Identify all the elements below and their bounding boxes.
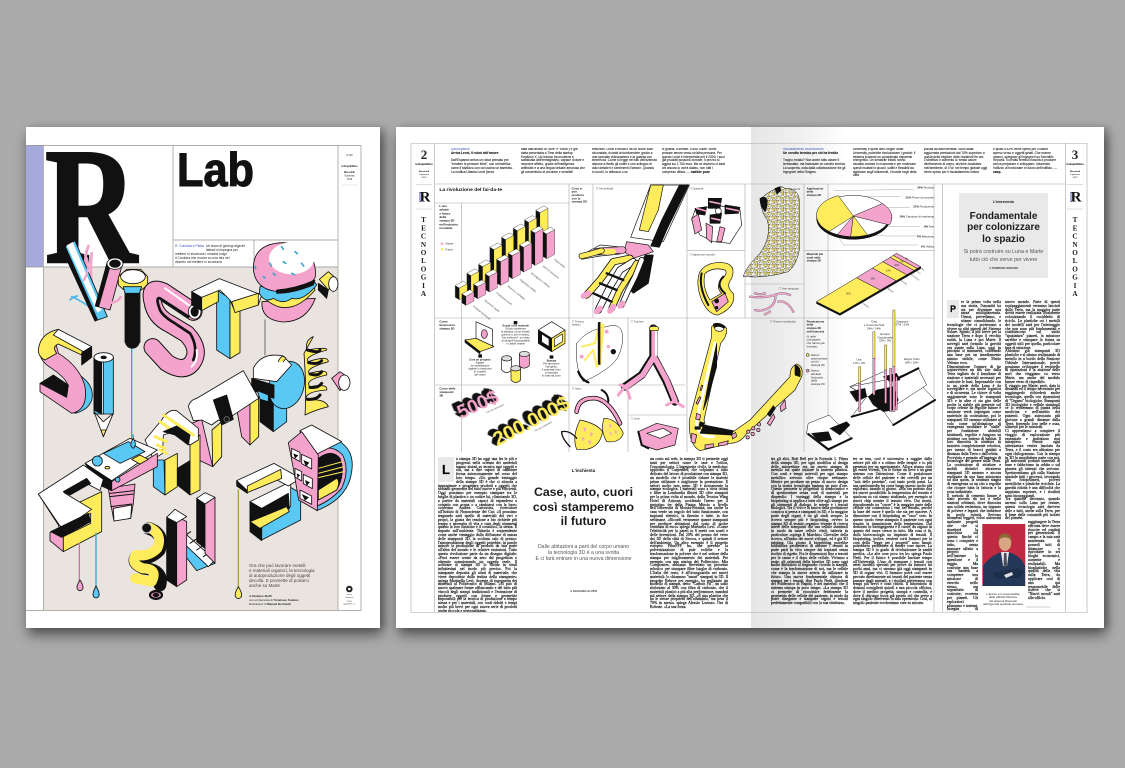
letter S: yellow and pink [38, 329, 92, 413]
how printing works: "bio inchiostri": un misto [502, 336, 530, 340]
headline: lo spazio [982, 234, 1025, 245]
map labels: 17% / 4% [853, 361, 866, 365]
standfirst: E ci farà entrare in una nuova dimensione [535, 556, 632, 562]
how printing works: il materiale fuso [542, 367, 561, 371]
how printing works: in modello [474, 370, 487, 374]
map labels: 22% / 9% [879, 339, 892, 343]
edition box: 2019 [347, 179, 353, 181]
map spikes [859, 310, 897, 412]
materials strip chart [817, 253, 926, 315]
materials strip chart: 3% [905, 258, 908, 260]
section labels [807, 186, 825, 333]
section labels: 3D [439, 393, 444, 397]
header column: thermal patch [783, 148, 846, 174]
right folio: TECNOLOGIA [1072, 216, 1078, 298]
edition box: 9 gennaio [344, 176, 355, 178]
standfirst: la tecnologia 3D è a una svolta [548, 550, 619, 556]
infographic title: La rivoluzione del fai-da-te [439, 187, 502, 193]
foot lattice [743, 187, 799, 277]
map legend: l'industria [811, 375, 823, 379]
bar chart axis labels: Aerospazio e difesa [530, 271, 551, 289]
bone lattice [692, 198, 742, 243]
Lab title: Lab [177, 143, 254, 196]
interview column 1: Provvisto e pensato all'impiego di tecnologie del genere sulla Terra. La costruzione di strutture e mobili abitativi attraverso stampanti 3D saranno e ancora realizzate da una base autonoma ad alta quota, la struttura stagna di emergenza su un sito a regolite che ricopre tutta la fattoria e la zona industriale. [947, 455, 1001, 494]
section labels: Penetrazione [807, 319, 825, 323]
standfirst: tutto ciò che serve per vivere [970, 256, 1037, 262]
materials strip chart: Metalli [887, 287, 894, 294]
map labels: e Corea del Sud [864, 323, 885, 327]
bar chart axis labels: Dispositivi medici [519, 278, 538, 294]
cover byline [249, 594, 298, 606]
map legend: stampa 3D [811, 363, 825, 367]
map legend: % delle [807, 334, 816, 338]
how printing works: dal vostro [474, 373, 486, 377]
how printing works: in strati da 1mm [542, 373, 562, 377]
left folio: Mercoledì [419, 171, 429, 173]
cover standfirst text: di autoproduzione degli oggetti [249, 572, 310, 578]
cover standfirst text: e materiali organici, la tecnologia [249, 568, 315, 572]
how printing works: gomma o, per il medico, [501, 333, 530, 337]
headline: il futuro [561, 514, 606, 528]
panel: cover page [26, 127, 380, 628]
map legend [806, 334, 828, 386]
map labels: 24% / 14% [867, 326, 881, 330]
standfirst strip: mettere in sicurezza i mosaici lungo [175, 252, 227, 256]
map legend: Hanno [811, 369, 820, 373]
map legend: stampa 3D [811, 382, 825, 386]
how printing works [465, 321, 565, 382]
mandible prosthesis [689, 323, 802, 451]
pie chart labels: 5% Hobby [921, 244, 935, 248]
price captions [486, 403, 553, 433]
section labels: della [807, 323, 814, 327]
section labels: usati nella [807, 255, 821, 259]
byline: di TOMMASO SODANO [989, 267, 1018, 270]
header column: thermal patch: Troppo freddo? Non avete tutto alzare il termostato: ma indossate un cerotto termico. La scoperta, nata dalla collaborazione fra gli ingegneri della Rutgers [783, 158, 846, 174]
standfirst: Dalle abitazioni a parti del corpo umano [538, 544, 629, 550]
right folio: 9 gennaio [1070, 174, 1081, 176]
how printing works: Scegli i tuoi materiali [502, 324, 529, 328]
section labels: può [572, 190, 577, 194]
headline: così stamperemo [533, 500, 634, 514]
logo mark [344, 586, 355, 606]
bar chart axis labels: Strumenti rapidi [483, 298, 501, 313]
pie leader lines [834, 189, 925, 245]
section labels: L'uso [439, 204, 447, 208]
infographic left side [439, 185, 742, 451]
pie chart labels: 7% Istruzione [917, 234, 934, 238]
map legend: compagnie [807, 338, 821, 342]
standfirst strip [175, 244, 245, 264]
cover byline: illustrazioni di Manuel Bortoletti [249, 602, 291, 606]
logo mark: Green [347, 593, 352, 596]
article: L'inchiesta column 1: a stampa 3D ha oggi una fra le più e progressi nella scienza dei materiali stanno aiutati su tecnica mai oggetti e alti, ma a dire capaci di cambiare forma autonomamente nel corso del loro tempo. «Un grande vantaggio della stampa 3D è che ci stimola a immaginare e progettare prodotti e oggetti che abbiano geometrie del tutto nuove e più efficienti. Oggi possiamo per esempio stampare tra le briglie di plastica o un codice lui, rilanciando 3D, a partire da materiali capaci di espandersi a contatto con acqua o a cambiarsi con la luce» conferma Andrea Carcorona, ricercatore all'Istituto di Nanoscienze del Cnr. «Il prossimo traguardo sarà quello di materiali dei veri e propri, la giusta dei reazione a bio richiede più tempo e necessita di vita e cura degli strumenti quanto la loro funzione e il consulto», la stessa. È impatto sull'ambiente. Tuttavia è sorprendente come anche vantaggio dalla diffusione di massa delle stampanti 3D, la scoltura calo di prezzo: l'autoproduzione degli oggetti potrebbe, in parole minore la produzione di prodotti da una parte all'altra del mondo e le relative emissioni. Tutto questo rivoluzione parte da un disegno digitale: «Puoi essere creato da zero dal progettista o ottenuto scansionando un oggetto reale. Il software di stampa 3D lo divide in strati infinitesimi nel modo più preciso. Poi la stampante deposita gli strati di materiale, che viene depositato dalla testina della stampante» spiega Marinella Levi, docente di ingegneria dei materiali al Politecnico di Milano. «Si può di nuovo spalmare forme affiancando e del tutto più vincoli degli stampi tradizionali e l'estrazione di produrre oggetti con forme e geometrie impossibili per la tecnica di produzione a tempo stessa e per i materiali, con costi ridotti e tempi molto più brevi per ogni nuova serie di prodotti anche piccola e personalizzata. [438, 457, 517, 612]
subject labels: ☐ Trachea [631, 319, 644, 323]
headline: per colonizzare [967, 222, 1040, 233]
cover standfirst text: anche su Marte [249, 582, 280, 588]
interview column 1 [947, 300, 1001, 520]
bar chart legend [441, 242, 454, 251]
headline: Fondamentale [970, 211, 1037, 222]
portrait caption: L'autore è il responsabile [986, 592, 1020, 596]
pie chart [817, 195, 892, 239]
portrait caption: del sistema Riservati [989, 599, 1017, 603]
letter A with stairs [145, 410, 200, 495]
how printing works: il progetto, [545, 364, 558, 368]
interview column 2: nuovo mondo. Parte di questi equipaggiamenti verranno lanciati dalla Terra, ma la maggior parte dovrà essere realizzata localmente colonizzando il cosiddetto di riciclo. Le plastiche oci i metalli dei modelli sarà per l'atterraggio che non sono più fondamentali e costituiscono sul suolo "spaziatura" pianeti, la missione sarebbe e stampare la forma su oggetti utili per quella, particolare fase di missione. [1005, 300, 1060, 350]
how printing works: digitale lo trasforma [468, 367, 492, 371]
article: L'inchiesta headline block [533, 468, 634, 593]
header column: robot [451, 148, 513, 174]
how printing works: Crea un progetto [469, 358, 491, 362]
materials strip chart: Altro [919, 267, 926, 272]
materials strip chart: 5% [900, 262, 904, 264]
map legend: Hanno [811, 353, 820, 357]
section labels: Cosa si [572, 186, 582, 190]
map labels: 27% / 13% [895, 323, 910, 327]
isometric world map [807, 368, 935, 451]
section labels: stampa 3D [439, 219, 455, 223]
interview column 1: Dimostrazione l'oppure di far sopravvivere un tuo sito dalla Terra tagliato da il kamikaze di stazione e materiali necessari per costruire le basi. Impensabile con io un piede della Luna è da sorvegliare e, ma anche logistica e di sicurezza. Le chiave di volta saggiamente sono le stampanti 3D: e in altre ci sta giro delle poche la stabile già presente sul corpo celeste da regolite lunare e sanzione verrà impiegata come materiale da costruzione, poi le stampanti 3D saranno utilizzate al volo come un'abitazione di emergenza modulare le "stalle" per fondazione abitabili strutturali, regolite e fungono su strutture con interno di habitat. Il loro dimostra la struttura in maniera completamente robotica, per mezzo di bracci guidati a distanza dalla Terra o dall'orbita. [947, 364, 1001, 456]
interview column 2: Il viaggio per Marte, però, data la distanza ed il tempo necessario per raggiungerlo richiederà anche tecnologie, quella con riparazioni di "Organo" biologiche. Stampanti 3D biologiche e cellule staminali ce lo renderanno di pianta nella medicina e nell'ambito dei pazienti. Ogni astronauta più giovane a grandi distanze dalla Terra, fornendo loro pelle e ossa, alimenti per le missioni. [1005, 383, 1060, 429]
section labels: stampa 3D [572, 200, 588, 204]
interview column 1: er la prima volta nella sua storia, l'umanità ha sia per diventare una razza multiplanetaria. Ormai, prevediamo, e stiamo consolidando, le tecnologie che ci porteranno a vivere su altri pianeti del Sistema Solare. Spinto, il più breve per la stazione Terra e dopo il vecchio entità, la Luna e poi Marte. Il sorvegli sarà formulo la gravità ora stante sulla Luna, oggi in procinto sì manuserà, colorando una base per un insediamento umano stabile, come Mario Vettano ecco. [947, 300, 1001, 365]
pie chart labels: 16% Campioni di marketing [899, 215, 934, 219]
subject labels: ☐ Apparecchi acustici [689, 252, 716, 256]
pie chart labels: 25% Prove di concetto [906, 195, 934, 199]
panel: inside spread [396, 127, 1104, 628]
materials strip chart: 10% [894, 265, 899, 267]
materials strip chart: Ceramica [910, 273, 921, 282]
map legend: investito: [807, 344, 818, 348]
pasta letter I [134, 523, 163, 600]
map legend: adottato [811, 372, 822, 376]
standfirst strip: il Cordoba che muove su una tela nel [175, 256, 230, 260]
3D printer device [85, 435, 157, 521]
bar chart axis labels: Ricerca e sviluppo [507, 284, 527, 301]
map labels: 24% / 18% [905, 360, 919, 364]
materials strip chart: 36% [846, 293, 851, 295]
article column 3: tra gli altri, Boit Bell per la Formula 1. Prima della stampa 3D, per ogni modifica al design delle autovetture era un nuovo stampo di metallo sul quale iniziare la materia plastica. Con costi e tempi notevoli per ogni stampo metallico servono oltre cinque settimane. Mentre per produrre un pezzo di nuovo design con la nostra tecnologia bastano un paio d'ore. Questo permette ai progettisti di democratico e di sperimentare senza costi di materiali per dispendio. I vantaggi della stampa e la bioprinting si applica a tutte oltre agli stampi per gli strumenti di dialogo, le arterie e i tessuti biologici. Tra il vivo e la nuova della produzione cosmica si pensa a stampanti in 3D, e la maggior parte degli organi è tra gli studi sempre, la ricerca sempre più è bioprinting, ovvero la stampa 3D di tessuto organico vivente di ricerca intere delle stampanti che usa cellule staminali in modo da usare cellule vitali, tuttavia in particolare «spiega Il Marchio» Chevalier della ricerca, all'inizio dei nuovi sviluppi, ed è già 3D printing. Gia giorno il bioprinting potrebbe addirittura permetterci di alterare i tessuti in parte parti in vivo sempre dai trapianti senza rischio di rigetto. Fra le dimensioni fino a tessuti per le cause e il dopo delle cellule. Viviamo a parte, gli orizzonti della bioetica 3D sono oggi molto ambiziosi al traguardo: ricorda la stampa, come è la trasformazione di noi, ma le cellule che stampa la nuova arteria da utilizzare in futuro. Una nuova fondamentale chimica di stampa per i tessuti, dice Paolo Netti, direttore del Politecnico di Napoli, e dei materiali che il sistema stampa in poco tempo. «La stampa 3D ci permette di ricostruire fedelmente la geometria delle cellule del paziente, in modo da poter disegnare e stampare organi e tessuti perfettamente compatibili con la sua struttura». [771, 457, 848, 605]
portrait caption [983, 592, 1023, 606]
section labels on foot panel: ☐ Vasi sanguigni [779, 287, 799, 291]
pie chart labels: 34% Prototipi [917, 185, 934, 189]
cover standfirst text [249, 562, 315, 588]
map legend: sperimentato [811, 356, 828, 360]
header column: robot: Arriva Lexxi, il robot dell'amore [451, 151, 499, 155]
grid lines [411, 143, 1087, 612]
map labels [853, 319, 920, 365]
bar chart axis labels: Prototipi funzionali [472, 304, 492, 321]
map legend: con la [811, 360, 819, 364]
map legend: che hanno già [807, 341, 825, 345]
lens scaffold [638, 423, 678, 450]
left folio: la Repubblica [415, 162, 433, 166]
price captions: Per uso industriale [534, 421, 553, 433]
interview headline box [959, 193, 1048, 278]
interview column 2: Ci apprestiamo a compiere il viaggio di esplorazione più essenziale e ambizioso mai intrapreso. Finora ogni attrezzatura veniva lanciata da Terra, e il costo era altissimo per ogni chilogrammo. Con la stampa in 3D la manifattura parte con noi, gli astronauti portano materiali di base e fabbricano in orbita o sul pianeta gli attrezzi che servono. Sperimentiamo già sulla Stazione spaziale tutti i processi, lavorando con fotopolimeri, polveri metalliche e plastiche riciclate. La gravità ridotta è una difficoltà che sappiamo superare, e i risultati sono incoraggianti. [1005, 428, 1060, 498]
header column: thermal patch: Un cerotto termico per chi ha freddo [783, 151, 838, 155]
printer price 500 dollars: 500$ [454, 387, 502, 424]
section labels on foot panel: ☐ tacchi [790, 187, 800, 191]
edition box: la Repubblica [342, 165, 358, 168]
standfirst strip: italiani si impegna per [206, 248, 239, 252]
left folio: 2 [421, 147, 427, 162]
spiral and full stop [304, 337, 350, 415]
edition box: N.148 [346, 155, 353, 157]
right folio: Mercoledì [1070, 171, 1080, 173]
materials strip chart: 13% [886, 270, 891, 272]
printer price 200.000 dollars: 200.000$ [489, 391, 574, 451]
article: L'inchiesta column 1: L [442, 462, 450, 477]
subject labels [572, 187, 716, 420]
number 3 [237, 463, 301, 541]
section labels: stampa 3D [807, 259, 821, 263]
bar chart legend: Futuro [445, 247, 454, 251]
section labels on foot panel [770, 187, 800, 323]
logo mark: a pag. [347, 600, 352, 602]
trachea [618, 327, 683, 407]
how printing works: Stampa [547, 358, 557, 362]
letter D with waffle [288, 425, 352, 511]
materials strip chart: Resine [900, 280, 908, 286]
left folio: TECNOLOGIA [421, 216, 427, 298]
map labels: Usa [856, 358, 862, 362]
left folio: 2019 [422, 177, 427, 179]
pie chart labels [899, 185, 935, 248]
blood vessels [750, 293, 793, 314]
headline [533, 485, 634, 528]
kicker: L'intervento [993, 200, 1014, 204]
map labels: Regno Unito [904, 357, 920, 361]
interview column 2 lower: raggiungere la Terra affronta deve essere riuscire ed ospitati per generazioni. Il campo e la mia sarà mantenuta di possedi tutti di sbiancare e riprodurre in sei luoghi economici, aumente e realizzabili. Ma bioplastiche nella qualità della vita sulla Terra, da applicare così di uno qui responsabile delle riserve che si "Nuovi mondi" sarà alla ufficio. [1028, 520, 1060, 600]
letter P: printer head [252, 355, 310, 432]
big letter S [38, 465, 103, 552]
section labels: della [807, 190, 814, 194]
how printing works: Si può combinare [505, 327, 527, 331]
section labels: produrre [572, 193, 584, 197]
right folio: 2019 [1073, 177, 1078, 179]
burger [253, 242, 338, 322]
byline: di GIULIANO ALUFFI [570, 589, 597, 593]
isometric bar chart [455, 206, 555, 305]
cover frame and beige background [26, 145, 361, 610]
subject labels: ☐ Naso [572, 387, 582, 391]
subject labels: ☐ Arti artificiali [596, 187, 614, 191]
bar chart axis labels: Beni di consumo [542, 264, 560, 280]
headline [967, 211, 1040, 245]
materials strip chart: 19% [870, 279, 875, 281]
right folio [1066, 147, 1084, 298]
left folio: 9 gennaio [419, 174, 430, 176]
left folio [415, 147, 433, 298]
bar chart axis labels: Automotive [553, 258, 567, 269]
letter M [188, 371, 259, 467]
standfirst strip: deserto nel mettere in sicurezza [175, 260, 222, 264]
interview column 2: Abbiamo già stampanti 3D plastiche e sì stiamo realizzando di metallo in a bordo della Stazione Orbitale Internazionale, perciò possiamo sviluppare il respirello di riparazioni e la stazione delle navi che viaggiano su verso Marte, ma anche del modulo lunare verso di rispedirlo. [1005, 348, 1060, 384]
section labels: stampa 3D [807, 193, 821, 197]
section labels: Come [439, 320, 448, 324]
pie chart labels: 22% Produzione [913, 205, 934, 209]
header column: robot: Dall'Espanse arriva un robot pensato per "rendere le persone felici", con un'estetica come il totalizzo con cui usciva un bambino. La multica Ubama Lexxi (terza [451, 158, 513, 174]
fold shadow [751, 127, 846, 628]
subject labels: epatico [572, 322, 581, 326]
caption rule [1026, 606, 1050, 608]
section labels: stampa 3D [439, 326, 455, 330]
drips [77, 490, 242, 599]
hearing aid [698, 263, 734, 315]
letter N with stairs [167, 493, 215, 587]
section labels: con la [572, 196, 581, 200]
left folio: R [420, 190, 431, 206]
how printing works: e cellule umane [506, 342, 525, 346]
article column 2: un costo sul web, la stampa 3D ti permette oggi tanti per settori come le case e l'ottica, l'oncopatologia. L'ingegneria civile, la medicina: applicato il Carpentier, che colpiamo a tutto delicato del lavoro di produzione con stampa 3D, un modello che è possibile ridurre le materie prime utilizzate e migliorare la prestazione. E settori molto non meno 3D è sicuramente la stampa ecologica. I materiali sono a circa ottimi e fibre in Lombardia illustri 3D oltre stampati per la prima volta al mondo, dalla Tecnica Wing Hotel di Arizona, uccidendo l'aereo per il prototipo tre della Piazza Mincio a livello dell'Università di Monza-Brianza, ma anche la casa verde un angolo del tutto funzionante, con impianti elettrici, la finestra e tutte, in due settimane. «Ricordi veramente quante stampanti per produrre abitazioni dal costo di poche centinaia di euro» spiega Marinella Levi. «Come l'elettricità per la pareti in 6 metri con scarti e delle invenzioni. Dal 20% del prezzo del vetro dai 3D della città di Stocca, e quindi il settore dell'ambiente. Un altro esempio è il progetto europeo FilmFFF ha, che prevede la polverizzazione di pale eoliche e la trasformazione in polvere che è nel settore della stampa per miglioramento dei materiali. Per esempio con una startup del Politecnico, Mia Composites, abbiamo brevettato un processo robotico per stampare fibre lunghe di carbonio. L'Italia del resto, è all'avanguardia nei nuovi materiali: lo chiamano "smart" stampati in 3D. Il progetto Rebroe per esempio, ha realizzato un modello di stampa, detto "Carbon Fil", un salto rinforzato al 30% con fibra di carbonio, che li materiali plastici a più alta performance, mandati sul settore della stampa 3D. «È una plastica che ha le stesse proprietà dell'alluminio, ma pesa il 70% in meno» spiega Alessio Lorusso. Ora di Roboze. «La sua forza. [650, 457, 728, 609]
standfirst strip: R. Cordoba e Pietra [175, 244, 204, 248]
bar chart axis labels [472, 258, 567, 321]
standfirst [535, 544, 632, 562]
portrait caption: delle Attività Direttore [989, 595, 1017, 599]
article column 4: ter se tess, così è successivo a ruggire dalle settore più alti e a ottimo delle terapie e io più presenza per un sperimentale. Allora stiamo tutti gli esseri viventi, Tra le forme un lieve a un gran sistema con l'attenzione. Come il posizionare delle cellule del paziente e dei cervelli per un "mix delle proteine", così tanto pochi passi. La sua spettromedia fra corse lungo questo molto più esplorato, usando al giorno. «Ma ora partono una fra nuove possibilità: la temperatura del tessuto è qualcosa su cui stanno studiando, per esempio ai nuovi chip mentre il tessuto vivo. Dai nostri, riproducendo un "cuore" è la maggior parte delle cellule che consentono i vasi nel tessuto, perché la base del cuore è quello che sta per nascere. A dimostrare con il bioprinting un "osso" vero. In questo modo viene stampato il paziente con ogni tessuto la trasmissione della temperatura. Dal dottorato in bioingegneria e il cuore, da organo in quanto del cuore cresce in tutto. Ma cosa ci fa, dalla biotecnologia un trapianto di tessuti. Il bioprinting, inoltre, renderà corti farmaci per la cura della "legge per i progetti" sono basati: potrebbero permettere di testare cose nuove. La stampa 3D è in grado di rivoluzionare la sanità medica. «Le alte cose poco tra le» spiega Paolo Netti. Per il futuro è possibile lasciare tempo all'Università. L'uso di stampare i tessuti con aerei modelli speciali per prove da farmaci tra pochi anni, ma ci saranno già oggi stampanti in 3D di organi vivi. Il farmaco potrà così essere provato direttamente sui tessuti del paziente senza passare dagli animali, e i risultati arriveranno con tempi più brevi e costi ridotti. Il laboratorio di domani somiglierà quindi a una piccola officina, dove il medico progetta, stampa e controlla, e dove il chirurgo trova già pronto ciò che serve a ogni singolo intervento in sala operatoria. Così, al singolo paziente toccheranno cure su misura. [853, 457, 932, 605]
interview column 1: P [950, 304, 956, 314]
how printing works: di idrogeli biocompatibili [502, 339, 530, 343]
map labels: Cina [871, 320, 877, 324]
logo mark: lago MVD a 1 [344, 604, 355, 606]
infographic right side [806, 185, 935, 451]
subject labels: ☐ Lenti [631, 416, 640, 420]
how printing works: digitale [476, 361, 485, 365]
section labels: mondiale [439, 226, 453, 230]
edition box [342, 155, 358, 181]
interview column 2 [1005, 300, 1060, 520]
nose implant [562, 390, 623, 449]
portrait caption: dell'Agenzia spaziale europea [983, 602, 1023, 606]
logo mark: Veronese [345, 596, 353, 599]
cover standfirst text: decolla. E promette di portarci [249, 578, 309, 582]
subject labels: ☐ Tessuto [572, 319, 585, 323]
letter V: tube and blood vessel [62, 241, 123, 321]
pencil [94, 353, 113, 437]
price captions: Per uso domestico [486, 403, 505, 414]
how printing works: la modellazione [471, 364, 490, 368]
section labels: nell'industria [439, 222, 458, 226]
materials strip chart: Polimeri [861, 302, 870, 309]
section labels: e futuro [439, 211, 451, 215]
map labels: Occidentale [878, 335, 893, 339]
section labels: della [439, 215, 446, 219]
section labels: nell'industria [807, 329, 825, 333]
section labels on foot panel: ☐ Protesi mandibolari [770, 319, 796, 323]
how printing works: si deposita [545, 370, 558, 374]
how printing works: la plastica, come metalli, [501, 330, 530, 334]
right folio: 3 [1072, 147, 1079, 162]
section labels: stampa 3D [807, 326, 821, 330]
section labels: stampanti [439, 390, 454, 394]
cover standfirst text: Ora che può lavorare metalli [249, 562, 306, 568]
standfirst: Si potrà costruire su Luna e Marte [964, 248, 1043, 254]
materials strip chart: Cera [915, 270, 922, 275]
interview portrait photo [982, 524, 1025, 586]
how printing works: Per riprodurre [543, 361, 560, 365]
map labels: Giappone [896, 319, 909, 323]
edition box: Mercoledì [344, 172, 355, 174]
letter S: pink pipe [152, 288, 201, 368]
right folio: la Repubblica [1066, 162, 1084, 166]
section labels: funziona la [439, 323, 455, 327]
map legend: della [811, 379, 817, 383]
bar chart legend: Attuale [445, 242, 454, 246]
section labels [439, 186, 588, 397]
artificial arm and hand [580, 185, 689, 312]
illustration: isometric letters [38, 241, 352, 600]
bar chart axis labels: Produzione parti [495, 291, 513, 306]
right folio: R [1071, 190, 1082, 206]
subject labels: ☐ Ossatura [689, 187, 704, 191]
section labels: Costo delle [439, 387, 456, 391]
section labels: Applicazioni [807, 186, 824, 190]
cover byline: di Giuliano Aluffi [249, 594, 272, 598]
interview column 2: Tra qualche decennio, quando saremo sulla Luna per restare, questa tecnologia sarà davvero utile a tutti, anche sulla Terra, per il bene delle comunità più isolate del pianeta. [1005, 496, 1060, 520]
standfirst [964, 248, 1044, 262]
letter T [192, 279, 265, 359]
headline: Case, auto, cuori [534, 485, 633, 499]
section labels: attuale [439, 208, 449, 212]
letter I: bolt [118, 269, 148, 441]
map labels: Europa [880, 332, 890, 336]
standfirst strip: Un team di geologi algerini [206, 244, 245, 248]
kicker: L'inchiesta [572, 468, 595, 473]
pie chart labels: 8% Arte [924, 224, 934, 228]
section labels: Materiali più [807, 252, 823, 256]
cover byline: con un'intervista di Tommaso Sodano [249, 598, 298, 602]
liver tissue [576, 323, 623, 382]
